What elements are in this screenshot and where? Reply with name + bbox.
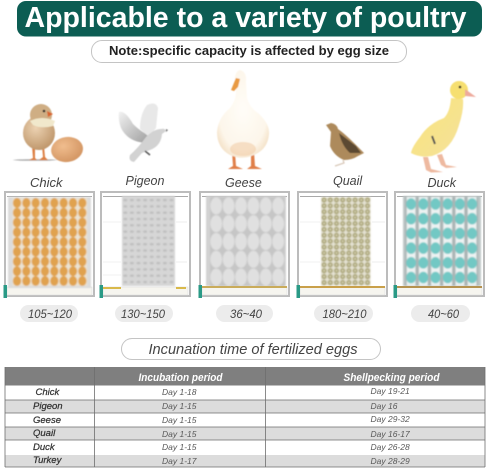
capacity: pigeon xyxy=(115,305,173,322)
incubation table: Turkey xyxy=(33,455,63,466)
incubation table: Pigeon xyxy=(33,401,63,412)
incubation table: Day 1-15 xyxy=(162,442,197,452)
incubation table: Incubation period xyxy=(138,372,223,384)
incubation heading pill xyxy=(122,338,380,360)
incubation table: Day 19-21 xyxy=(370,386,410,396)
incubation heading pill: Incunation time of fertilized eggs xyxy=(148,341,358,358)
tray: pigeon eggs xyxy=(100,192,190,298)
tray: duck eggs xyxy=(394,192,484,298)
capacity: geese: 36~40 xyxy=(230,307,262,321)
capacity: quail: 180~210 xyxy=(322,307,367,321)
incubation table: Day 28-29 xyxy=(370,456,410,466)
incubation table: Day 1-18 xyxy=(162,387,197,397)
label: Quail: Quail xyxy=(333,174,363,188)
label: Geese: Geese xyxy=(225,176,262,190)
icon: chick in shell with egg xyxy=(13,104,85,164)
tray: chick eggs xyxy=(4,192,94,298)
capacity: chick xyxy=(20,305,78,322)
incubation table xyxy=(5,367,485,467)
incubation table: Day 1-17 xyxy=(162,456,197,466)
capacity: pigeon: 130~150 xyxy=(121,307,165,321)
incubation table: Day 1-15 xyxy=(162,429,197,439)
icon: white goose xyxy=(217,70,269,169)
icon: yellow duckling xyxy=(411,81,476,172)
capacity note pill xyxy=(92,40,406,62)
label: Pigeon: Pigeon xyxy=(126,174,164,188)
icon: quail xyxy=(326,123,364,166)
incubation table: Day 16-17 xyxy=(370,429,410,439)
incubation table: Shellpecking period xyxy=(344,372,440,384)
capacity: duck xyxy=(411,305,470,322)
incubation table: Day 1-15 xyxy=(162,415,197,425)
capacity: chick: 105~120 xyxy=(28,307,72,321)
capacity note pill: Note:specific capacity is affected by egg size xyxy=(109,43,389,58)
icon: white pigeon in flight xyxy=(119,104,168,162)
capacity: quail xyxy=(314,305,373,322)
title banner: Applicable to a variety of poultry xyxy=(24,2,467,34)
incubation table: Quail xyxy=(33,428,56,439)
incubation table: Day 1-15 xyxy=(162,401,197,411)
incubation table: Geese xyxy=(33,415,61,426)
capacity: duck: 40~60 xyxy=(428,307,459,321)
incubation table: Duck xyxy=(33,442,56,453)
incubation table: Day 26-28 xyxy=(370,442,410,452)
incubation table: Chick xyxy=(36,387,61,398)
incubation table: Day 16 xyxy=(370,401,398,411)
label: Duck: Duck xyxy=(428,176,457,190)
capacity: geese xyxy=(216,305,273,322)
incubation table: Day 29-32 xyxy=(370,414,410,424)
label: Chick: Chick xyxy=(30,175,64,190)
tray: quail eggs xyxy=(296,192,387,298)
tray: geese eggs xyxy=(198,192,289,298)
